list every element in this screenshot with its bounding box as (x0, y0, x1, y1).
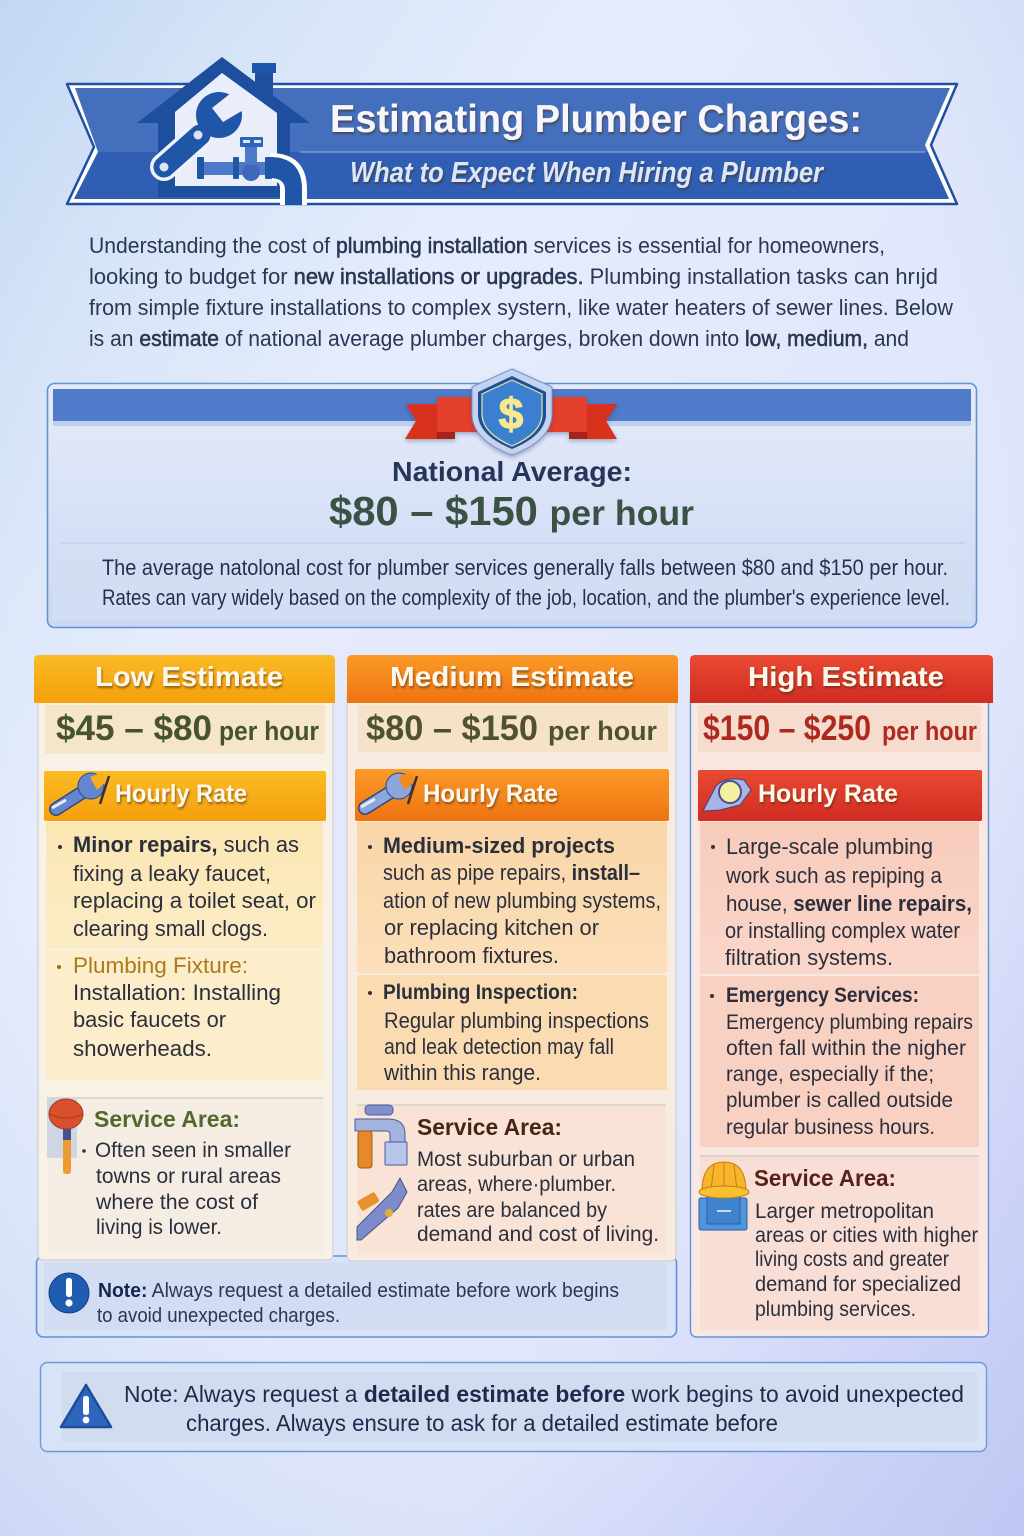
service area: low: where the cost of (95, 1191, 258, 1214)
intro paragraph: Understanding the cost of plumbing installation services is essential for homeowners, (89, 233, 885, 258)
list: high: house, sewer line repairs, (726, 891, 972, 916)
icon: faucet (355, 1105, 407, 1168)
note text: Note: Always request a detailed estimate before work begins to avoid unexpected (124, 1381, 964, 1407)
header: low: Low Estimate (95, 661, 283, 692)
list: high: Large-scale plumbing (726, 834, 933, 859)
intro paragraph (89, 233, 953, 351)
list: low: Minor repairs, such as (73, 832, 299, 857)
list: medium: bathroom fixtures. (384, 943, 559, 968)
list: high: Emergency plumbing repairs (726, 1011, 973, 1034)
panel: bottom note (40, 1362, 986, 1452)
icon: warning triangle (61, 1385, 111, 1427)
list: high: Emergency Services: (726, 984, 919, 1007)
service area: high: plumbing services. (755, 1298, 916, 1321)
icon: red ribbon (405, 397, 617, 439)
price: medium: $80 – $150 (366, 709, 538, 748)
list: high: range, especially if the; (726, 1063, 934, 1086)
service area: medium: Service Area: (417, 1114, 562, 1140)
list: medium: Plumbing Inspection: (383, 981, 578, 1004)
icon: dollar shield: $ (499, 390, 523, 439)
list: high: often fall within the nigher (726, 1037, 966, 1060)
icon: pipe wrench (357, 1178, 407, 1240)
service area: high (699, 1155, 979, 1330)
list: medium (357, 822, 667, 1090)
header: medium (347, 655, 678, 703)
subtitle: What to Expect When Hiring a Plumber (350, 157, 825, 189)
list: low: basic faucets or (73, 1007, 226, 1032)
list: low: Installation: Installing (73, 980, 281, 1005)
price: low: per hour (219, 716, 319, 746)
bar: hourly rate low: Hourly Rate (115, 780, 247, 808)
price: high (698, 705, 981, 752)
service area: high: demand for specialized (755, 1273, 961, 1296)
service area: high: Service Area: (754, 1165, 896, 1191)
header: low (34, 655, 335, 703)
header: high: High Estimate (748, 661, 944, 692)
list: medium: ation of new plumbing systems, (383, 888, 661, 913)
icon: hard hat worker (699, 1162, 749, 1230)
list: low: fixing a leaky faucet, (73, 861, 271, 886)
list: high: filtration systems. (725, 945, 893, 970)
header: high (690, 655, 993, 703)
note text (97, 1280, 619, 1327)
service area: medium (355, 1104, 666, 1255)
list: high (700, 822, 979, 1147)
list: low: showerheads. (73, 1036, 212, 1061)
list: high: regular business hours. (726, 1116, 935, 1139)
list: medium: or replacing kitchen or (384, 915, 599, 940)
price: high: $150 – $250 (703, 709, 871, 748)
bar: hourly rate high (698, 770, 982, 821)
icon: house with wrench and pipe (137, 57, 310, 205)
note container: low and medium (36, 1256, 676, 1337)
icon: dollar shield (472, 369, 552, 455)
list: low: replacing a toilet seat, or (73, 888, 316, 913)
intro paragraph: from simple fixture installations to complex systern, like water heaters of sewer lines. Below (89, 295, 953, 320)
list: medium: and leak detection may fall (384, 1034, 614, 1059)
national description: The average natolonal cost for plumber services generally falls between $80 and $150 per hour. (102, 555, 948, 580)
note text: charges. Always ensure to ask for a detailed estimate before (186, 1410, 778, 1436)
service area: high: areas or cities with higher (755, 1224, 978, 1247)
list: medium: such as pipe repairs, install– (383, 860, 640, 885)
panel: low estimate (34, 655, 335, 1260)
list: low (46, 822, 323, 1080)
service area: medium: areas, where·plumber. (417, 1173, 616, 1196)
price: medium: per hour (548, 716, 657, 746)
service area: low: Service Area: (94, 1106, 240, 1132)
list: low: clearing small clogs. (73, 916, 268, 941)
price: low (45, 705, 325, 754)
service area: low: Often seen in smaller (95, 1139, 291, 1162)
national rate: $80 – $150 per hour (329, 488, 694, 534)
list: high: plumber is called outside (726, 1089, 953, 1112)
service area: low (47, 1097, 323, 1253)
price: high: per hour (882, 716, 977, 746)
title banner (67, 57, 957, 205)
header: medium: Medium Estimate (390, 661, 634, 692)
list: medium: Regular plumbing inspections (384, 1008, 649, 1033)
heading: national average: National Average: (392, 456, 632, 487)
service area: low: living is lower. (96, 1216, 222, 1239)
icon: gauge (703, 779, 751, 811)
bar: hourly rate high: Hourly Rate (758, 780, 898, 808)
icon: wrench (361, 772, 417, 808)
note text (124, 1381, 964, 1436)
list: medium: Medium-sized projects (383, 833, 615, 858)
note text: Note: Always request a detailed estimate before work begins (98, 1280, 619, 1302)
list: medium: within this range. (383, 1060, 541, 1085)
service area: high: living costs and greater (755, 1248, 949, 1271)
service area: medium: Most suburban or urban (417, 1148, 635, 1171)
national description (102, 555, 950, 610)
icon: exclamation circle (49, 1273, 89, 1313)
price: medium (358, 705, 668, 752)
panel: medium estimate (347, 655, 678, 1261)
service area: high: Larger metropolitan (755, 1200, 934, 1223)
bar: hourly rate medium (355, 769, 669, 821)
price: low: $45 – $80 (56, 709, 212, 748)
note text: to avoid unexpected charges. (97, 1305, 340, 1327)
service area: medium: demand and cost of living. (417, 1223, 659, 1246)
intro paragraph: looking to budget for new installations or upgrades. Plumbing installation tasks can hrıjd (89, 264, 938, 289)
intro paragraph: is an estimate of national average plumber charges, broken down into low, medium, and (89, 326, 909, 351)
list: high: or installing complex water (725, 918, 960, 943)
service area: low: towns or rural areas (96, 1165, 281, 1188)
list: low: Plumbing Fixture: (73, 953, 248, 978)
bar: hourly rate low (44, 771, 326, 821)
icon: plunger (49, 1099, 83, 1174)
service area: medium: rates are balanced by (417, 1199, 607, 1222)
list: high: work such as repiping a (725, 863, 943, 888)
bar: hourly rate medium: Hourly Rate (423, 780, 558, 808)
icon: wrench (52, 772, 109, 809)
panel: high estimate (690, 655, 993, 1337)
panel: national average (48, 369, 976, 628)
title: Estimating Plumber Charges: (330, 98, 862, 141)
